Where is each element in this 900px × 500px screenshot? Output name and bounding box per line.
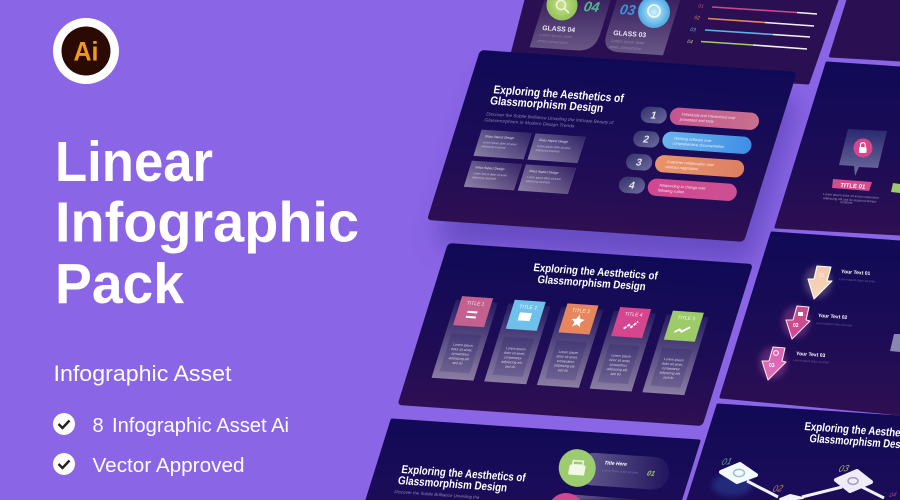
speech bubble [839,129,887,176]
glass card 1: adipiscing eiusmod [481,144,506,150]
heading [487,83,627,116]
column 1: dolor sit amet, [450,347,473,352]
panel background [427,50,797,242]
step 1: Individuals and interactions over [681,112,737,120]
caption: Lorem ipsum dolor sit amet consectetur [823,192,880,200]
column 4: sed do [610,372,621,376]
step 4: 4 [627,181,636,192]
text: Your Text 02: Lorem ipsum dolor sit amet [816,321,853,327]
column 5: consectetur [662,366,681,371]
column 3: Lorem ipsum [558,350,579,355]
heading: Glassmorphism Design [397,475,508,494]
pill: 01: Lorem ipsum dolor sit amet [601,468,639,475]
panel: right slide with arrows [721,233,900,414]
arrow 02: 02 [793,323,799,329]
glass card 1 [474,130,532,159]
step 3: contract negotiation [665,164,699,171]
title: Linear [55,130,213,194]
label: 04: 04 [888,491,898,499]
column 5: adipiscing elit [659,371,680,376]
glass card 04: amet consectetur [537,38,569,45]
glass card 4: Lorem ipsum dolor sit amet [527,175,562,181]
text: Your Text 02 [816,313,853,327]
progress labels: 02 [694,15,701,21]
column 4 [590,307,657,392]
icon: green magnifier circle [546,0,578,20]
column 4: TITLE 4 [624,312,643,319]
step 2: Working software over [673,136,713,143]
progress labels: 03 [690,27,697,33]
progress labels: 01 [698,4,705,10]
pill: 01 [548,448,678,493]
column 4: adipiscing elit [606,367,628,372]
progress labels [687,4,705,45]
glass card 2 [528,134,586,163]
column 4: dolor sit amet, [609,358,631,363]
text: Your Text 03: Lorem ipsum dolor sit amet [793,358,830,364]
title: Infographic [55,190,359,254]
column 4: Lorem ipsum [611,353,632,359]
step 4: Responding to change over [659,183,707,191]
glass card 03 [605,0,680,55]
panel background [367,420,699,500]
node 03 [836,471,871,491]
heading: Exploring the Aesthetics of [401,464,527,485]
step 1 [637,105,763,130]
column 2: dolor sit amet, [503,351,526,356]
label: 02: 02 [771,483,784,494]
text: Your Text 03: Your Text 03 [796,351,826,359]
panel: glass cards and progress bars slide [510,0,837,83]
glass card 2: Glass Aspect Design [538,138,569,144]
description: Glassmorphism in Modern Design Trends [484,117,576,129]
glass card 03: Lorem ipsum dolor [611,38,646,45]
column 3: adipiscing elit [554,363,575,369]
step 1: 1 [649,111,658,122]
glass shape at edge [890,334,900,352]
caption: ut labore [840,200,853,205]
caption [823,192,880,205]
panel: bottom slide with title here pill [367,420,699,500]
pill: 01: 01 [646,470,656,478]
label: 03: 03 [837,463,851,474]
step 2: comprehensive documentation [672,141,725,149]
step 3: 3 [634,158,644,169]
column 5: sed do [663,375,674,380]
title: Pack [55,252,184,316]
arrow 01: 01 [819,273,825,279]
panel: right slide with speech bubble [776,63,900,234]
step 4 [615,176,741,201]
column 3: consectetur [556,359,576,364]
panel: top right corner slide [830,0,900,60]
column 4: consectetur [609,363,629,368]
subtitle: Infographic Asset [54,361,232,386]
column 2: Lorem ipsum [505,346,526,351]
panel: five titled columns [397,243,753,426]
node 02 [780,495,803,499]
title [55,130,359,316]
description [484,111,615,131]
label: GLASS 04: GLASS 04 [542,25,576,34]
tag: green title [891,183,900,193]
column 3 [537,303,604,388]
column 3: dolor sit amet, [556,354,578,360]
column 1: consectetur [451,352,470,357]
label: 03: 03 [618,1,637,18]
glass card 2: Lorem ipsum dolor sit amet [536,144,571,150]
panel background [510,0,837,83]
column 2: sed do [504,365,516,369]
glow [712,474,752,496]
label: 01: 01 [720,456,733,467]
heading [397,464,527,494]
step 2: 2 [642,135,651,146]
glass card 3 [464,161,522,190]
column 1: adipiscing elit [448,356,470,361]
text: Your Text 01: Lorem ipsum dolor sit amet [839,277,876,283]
column 2: TITLE 2 [518,304,538,311]
icon: lock circle [854,138,872,158]
logo: Ai badge: Ai [74,36,98,66]
feature: 8 Infographic Asset Ai: Infographic Asset Ai [112,415,289,437]
panel: right bottom slide with nodes [688,405,900,500]
column 3: TITLE 3 [571,308,591,315]
glass card 3: Lorem ipsum dolor sit amet [473,171,508,177]
tag: TITLE 01: TITLE 01 [840,183,866,191]
arrow 02 [782,306,810,339]
glass card 03: amet, consectetur [609,44,643,51]
panel background [397,243,753,426]
step 4: following a plan [657,188,685,194]
pill: pink circle [552,493,640,500]
column 5: Lorem ipsum [664,357,684,362]
column 1: Lorem ipsum [453,343,474,348]
column 2 [484,299,552,384]
description: Discover the Subtle Brilliance Unveiling the [394,489,481,500]
step 3: Customer collaboration over [666,159,716,167]
panel background [721,233,900,414]
column 2: consectetur [504,355,523,360]
node 01 [721,464,756,482]
column 3: sed do [557,368,569,373]
step 2 [629,129,756,154]
glass card 4: adipiscing eiusmod [525,179,551,185]
text: Your Text 01: Your Text 01 [841,269,871,277]
glass card 2: adipiscing eiusmod [535,148,560,154]
pill: 01: Title Here [603,460,628,468]
logo: Ai badge [53,18,119,84]
panel shadow [435,75,800,265]
arrow 03: 03 [769,363,775,369]
glass card 4 [518,165,576,194]
heading [527,262,660,294]
text: Your Text 03 [793,351,830,364]
connector lines [747,481,884,498]
step 1: processes and tools [679,117,715,124]
panel background [688,405,900,500]
column 5 [642,310,710,395]
arrow 03 [759,347,787,380]
step 3 [622,153,748,178]
column 2: adipiscing elit [501,360,522,365]
column 5: TITLE 5 [676,315,696,322]
panel: exploring glassmorphism with numbered pills [427,50,797,242]
glass card 3: adipiscing eiusmod [471,175,497,181]
column 1: TITLE 1 [466,301,485,308]
heading: Exploring the Aesthetics of [533,262,659,283]
label: GLASS 03: GLASS 03 [613,30,647,39]
glass card 4: Glass Aspect Design [529,169,559,175]
heading: Glassmorphism Design [536,274,647,293]
text: Your Text 01 [839,269,876,283]
column 5: dolor sit amet, [661,362,684,367]
panel background [776,63,900,234]
feature: 8 Infographic Asset Ai: 8 [92,415,104,437]
feature: Vector Approved: Vector Approved [92,455,244,477]
glass card 04: Lorem ipsum dolor [539,32,574,39]
heading: Glassmorphism Design [489,94,604,115]
tag: TITLE 01 [832,179,872,191]
glass card 3: Glass Aspect Design [475,165,505,171]
column 1 [432,296,499,381]
arrow 01 [804,266,832,299]
text: Your Text 02: Your Text 02 [818,313,848,321]
description: Discover the Subtle Brilliance Unveiling the Intricate Beauty of [486,111,615,125]
feature: 8 Infographic Asset Ai [53,413,289,437]
progress bars [701,7,817,49]
glass card 1: Lorem ipsum dolor sit amet [482,140,517,146]
caption: adipiscing elit sed do eiusmod tempor [823,196,878,204]
glass card 1: Glass Aspect Design [484,134,515,140]
progress labels: 04 [687,39,694,45]
heading: Exploring the Aesthetics of [493,83,625,105]
column 1: sed do [452,361,463,366]
icon: blue chat circle [638,0,670,28]
glass card 04 [530,0,611,50]
